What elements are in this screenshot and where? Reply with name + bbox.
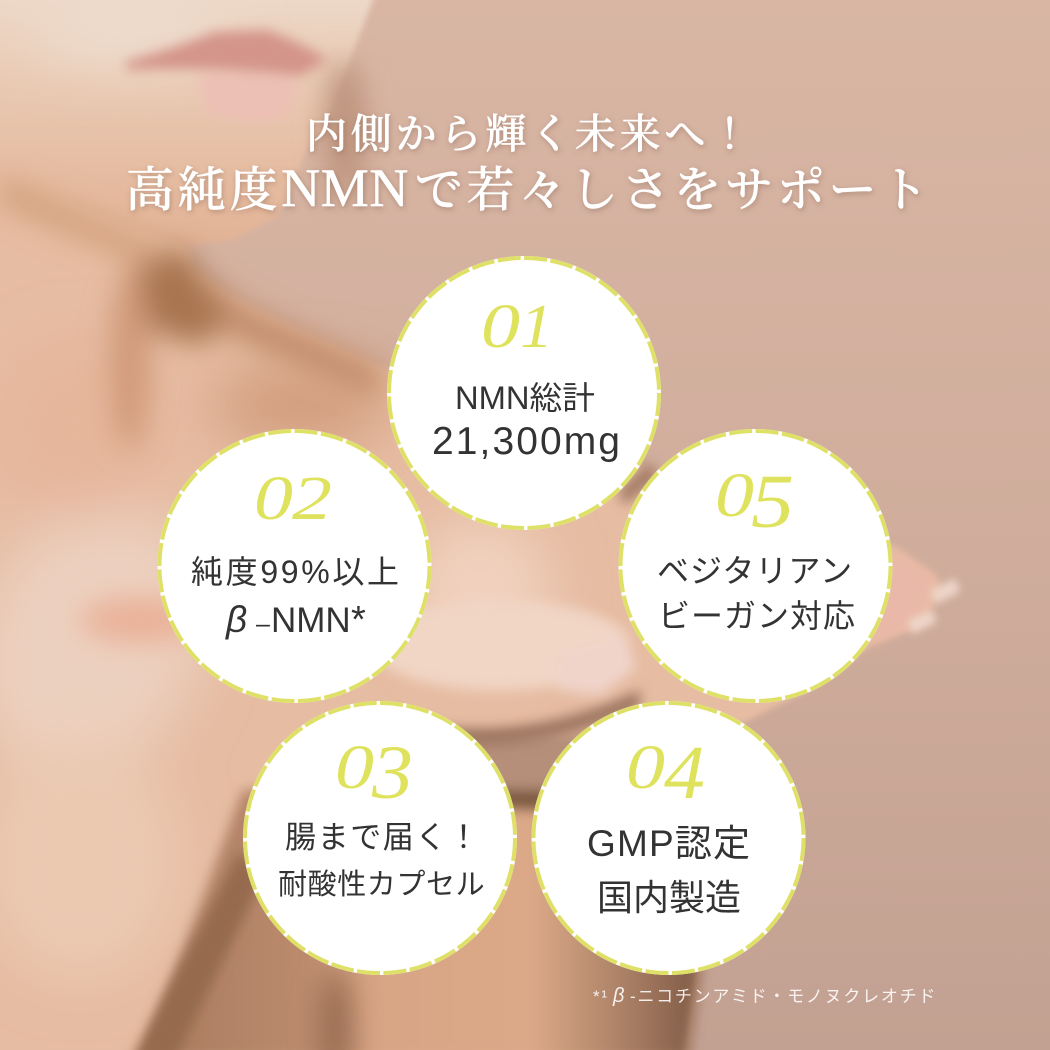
title (126, 111, 932, 218)
feature circle 05 (618, 429, 892, 703)
number 03: 0 (335, 734, 374, 802)
fingernails (908, 578, 960, 634)
label: NMN total: NMN総計 (455, 380, 595, 416)
number 03 (335, 731, 413, 815)
label: beta NMN: β (225, 599, 247, 640)
number 01: 1 (520, 293, 553, 361)
feature circle 02 (158, 429, 432, 703)
number 01: 0 (481, 293, 520, 361)
number 01 (481, 293, 553, 361)
footnote: -ニコチンアミド・モノヌクレオチド (630, 987, 937, 1006)
label: beta NMN: – (256, 610, 270, 638)
label: vegan: ビーガン対応 (658, 598, 856, 634)
feature circle 01 (387, 256, 661, 530)
title line 2: 高純度NMNで若々しさをサポート (126, 158, 932, 218)
number 04: 4 (664, 731, 705, 815)
lower body shades (140, 735, 700, 1050)
number 05: 5 (751, 460, 794, 544)
value: 21,300mg: 21,300mg (432, 420, 620, 463)
title line 1: 内側から輝く未来へ！ (306, 111, 754, 157)
skin tones (0, 0, 550, 980)
number 04 (626, 731, 705, 815)
hand and fingers (384, 601, 638, 700)
label: beta NMN: * (351, 599, 366, 641)
label: acid resistant capsule: 耐酸性カプセル (278, 868, 485, 901)
number 05: 0 (715, 462, 754, 530)
lips (126, 30, 328, 120)
arm and torso dark edges (132, 462, 660, 1050)
number 02: 2 (292, 465, 332, 533)
label: vegetarian: ベジタリアン (657, 553, 853, 589)
label: purity: 純度99%以上 (191, 554, 399, 590)
footnote: *¹ (593, 987, 609, 1006)
label: beta NMN: NMN (271, 601, 351, 640)
footnote: β (612, 985, 626, 1007)
feature circle 03 (243, 701, 517, 975)
label: GMP certified: GMP認定 (587, 823, 750, 864)
number 02: 0 (254, 465, 293, 533)
label: domestic manufacturing: 国内製造 (597, 877, 741, 918)
label: reaches intestines: 腸まで届く！ (285, 820, 481, 855)
neck and jaw shadows (0, 60, 385, 1050)
feature circle 04 (532, 701, 806, 975)
number 05 (715, 460, 794, 544)
number 04: 0 (626, 734, 665, 802)
number 03: 3 (371, 731, 413, 815)
number 02 (254, 465, 332, 533)
